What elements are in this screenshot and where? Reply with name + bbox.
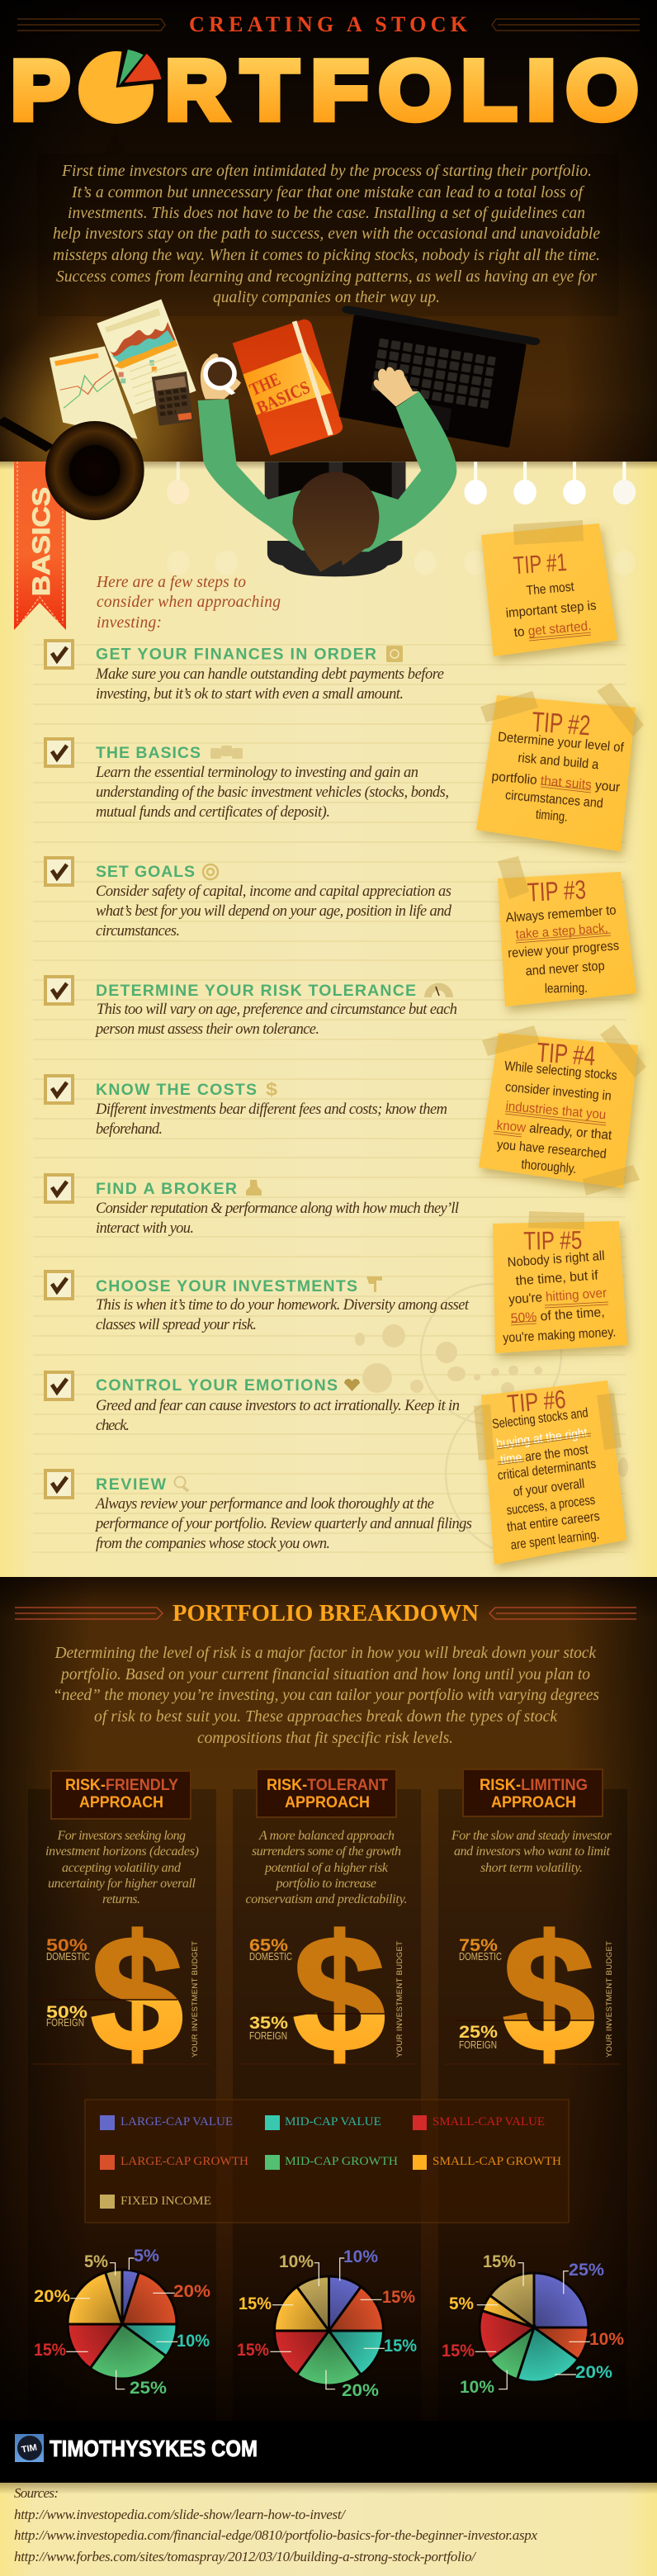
tip 4 note — [479, 1025, 646, 1196]
column: risk-friendly approach — [33, 1771, 210, 2086]
step title: GET YOUR FINANCES IN ORDER — [96, 646, 376, 664]
hand and coffee cup — [201, 353, 241, 399]
tip 6 note: buying at the right — [495, 1426, 588, 1451]
sources panel: http://www.investopedia.com/financial-edge/0810/portfolio-basics-for-the-beginner-investor.aspx — [14, 2527, 537, 2543]
book cover text: BASICS — [253, 376, 313, 418]
step text: Learn the essential terminology to investing and gain an — [95, 765, 418, 781]
tip 3 note: and never stop — [525, 959, 605, 978]
step: determine your risk tolerance — [45, 977, 457, 1038]
hanging white lights — [167, 462, 636, 575]
approach header: APPROACH — [79, 1794, 163, 1811]
approach description: conservatism and predictability. — [246, 1892, 408, 1906]
tip 1 note: TIP #1 — [513, 549, 568, 580]
checkbox — [45, 858, 73, 885]
step text: circumstances. — [96, 923, 180, 940]
step title: THE BASICS — [96, 744, 201, 762]
dollar split chart: $ — [293, 1901, 385, 2086]
icon: heart — [344, 1379, 360, 1391]
tip 4 note: consider investing in — [504, 1080, 612, 1104]
dollar split chart: $ — [503, 1901, 595, 2086]
dollar split chart — [33, 1901, 210, 2086]
title: portfolio with pie chart O: O — [566, 45, 638, 137]
pie chart: risk-limiting: 20% — [575, 2363, 612, 2382]
tip 1 note: important step is — [505, 599, 597, 621]
step title: DETERMINE YOUR RISK TOLERANCE — [96, 982, 416, 1000]
heading: creating a stock — [17, 12, 640, 36]
step text: performance of your portfolio. Review quarterly and annual filings — [94, 1516, 472, 1532]
tip 5 note: the time, but if — [515, 1269, 599, 1288]
icon: safe — [386, 646, 403, 662]
paper background — [0, 462, 657, 1577]
breakdown intro text — [53, 1645, 599, 1747]
approach description: For investors seeking long — [56, 1829, 186, 1843]
legend panel — [85, 2100, 569, 2223]
legend panel: MID-CAP GROWTH — [285, 2155, 398, 2168]
approach description: surrenders some of the growth — [252, 1844, 401, 1859]
tip 6 note: time are the most — [499, 1443, 589, 1467]
step: set goals — [45, 858, 452, 940]
step text — [95, 1101, 447, 1138]
step text: classes will spread your risk. — [96, 1317, 257, 1333]
step text — [94, 1496, 472, 1552]
pie chart: risk-limiting: 10% — [589, 2330, 624, 2349]
header background and desk — [0, 0, 657, 462]
step: know the costs — [45, 1076, 447, 1138]
dollar split chart: 35% — [249, 2014, 288, 2033]
step: review — [45, 1470, 472, 1552]
legend panel: LARGE-CAP GROWTH — [121, 2155, 248, 2168]
step title: FIND A BROKER — [96, 1180, 237, 1198]
title: portfolio with pie chart O: R — [166, 45, 228, 137]
approach header: APPROACH — [285, 1794, 370, 1811]
step text: Consider safety of capital, income and capital appreciation as — [96, 883, 451, 900]
approach description — [451, 1829, 612, 1875]
dollar split chart: 75% — [459, 1936, 498, 1955]
pie chart: risk-limiting: 15% — [442, 2342, 475, 2361]
footer brand bar — [0, 2421, 657, 2483]
dollar split chart: FOREIGN — [46, 2017, 84, 2029]
step text: Different investments bear different fees and costs; know them — [95, 1101, 447, 1118]
icon: magnifier — [175, 1476, 188, 1491]
dollar split chart: FOREIGN — [459, 2039, 497, 2051]
pie chart: risk-friendly: 15% — [34, 2341, 66, 2360]
step text — [96, 1297, 470, 1333]
step text — [95, 765, 449, 821]
tip 2 note: circumstances and — [504, 788, 603, 811]
dollar split chart: FOREIGN — [249, 2030, 287, 2042]
tip 5 note: 50% of the time, — [510, 1305, 605, 1326]
legend panel: FIXED INCOME — [121, 2195, 211, 2208]
sources panel: Sources: — [14, 2485, 59, 2501]
step title: SET GOALS — [96, 863, 195, 881]
heading: portfolio breakdown — [15, 1601, 636, 1627]
approach description: accepting volatility and — [62, 1861, 182, 1875]
step: get your finances in order — [45, 641, 444, 703]
dollar split chart: YOUR INVESTMENT BUDGET — [605, 1941, 614, 2057]
tip 6 note: success, a process — [506, 1494, 596, 1518]
icon: dollar: $ — [266, 1079, 277, 1100]
intro text panel: It’s a common but unnecessary fear that one mistake can lead to a total loss of — [71, 184, 585, 201]
pie chart: risk-limiting: 10% — [460, 2378, 494, 2397]
step text: mutual funds and certificates of deposit). — [96, 804, 330, 821]
tip 6 note: are spent learning. — [510, 1528, 600, 1553]
column: risk-tolerant approach — [238, 1769, 415, 2086]
pie chart: risk-friendly: 5% — [134, 2247, 159, 2266]
icon: plant — [366, 1276, 382, 1292]
pie chart: risk-tolerant: 10% — [343, 2247, 378, 2266]
tip 5 note: Nobody is right all — [507, 1249, 605, 1270]
checkbox — [45, 739, 73, 766]
approach description: A more balanced approach — [258, 1829, 395, 1843]
step title: CONTROL YOUR EMOTIONS — [96, 1376, 338, 1395]
intro to steps: Here are a few steps to — [96, 574, 246, 591]
dollar split chart: 50% — [46, 1936, 87, 1955]
pie chart: risk-friendly — [34, 2247, 210, 2398]
step text — [96, 1200, 459, 1237]
calculator — [152, 372, 194, 426]
approach header: APPROACH — [491, 1794, 576, 1811]
tip 1 note — [481, 520, 617, 656]
breakdown intro text: compositions that fit specific risk levels. — [197, 1730, 453, 1747]
tip 4 note: TIP #4 — [536, 1037, 597, 1071]
step text — [95, 666, 444, 703]
tip 2 note: Determine your level of — [497, 730, 625, 755]
tip 3 note: take a step back, — [515, 921, 608, 942]
tip 4 note: industries that you — [505, 1100, 607, 1122]
tip 1 note: The most — [526, 580, 575, 599]
tip 5 note: you're making money. — [503, 1325, 617, 1346]
sources panel: http://www.forbes.com/sites/tomaspray/2012/03/10/building-a-strong-stock-portfolio/ — [14, 2549, 477, 2564]
legend panel: SMALL-CAP GROWTH — [432, 2155, 561, 2168]
ribbon: basics: BASICS — [28, 487, 55, 596]
dollar split chart: YOUR INVESTMENT BUDGET — [191, 1941, 200, 2057]
logo: TIM — [21, 2442, 38, 2455]
dollar split chart: DOMESTIC — [459, 1951, 502, 1963]
chair — [265, 462, 405, 576]
pie chart: risk-tolerant: 15% — [382, 2288, 415, 2307]
logo — [15, 2434, 44, 2462]
approach header: RISK-LIMITING — [480, 1777, 588, 1794]
intro text panel — [37, 132, 619, 316]
breakdown intro text: portfolio. Based on your current financial situation and how long until you plan to — [59, 1666, 590, 1683]
title: portfolio with pie chart O: O — [78, 45, 154, 137]
approach description: returns. — [102, 1892, 140, 1906]
icon: person — [246, 1180, 262, 1196]
step text: This is when it’s time to do your homework. Diversity among asset — [96, 1297, 470, 1314]
step text: understanding of the basic investment vehicles (stocks, bonds, — [96, 784, 449, 801]
icon: target — [203, 864, 218, 879]
legend panel: LARGE-CAP VALUE — [121, 2115, 233, 2129]
tip 2 note: risk and build a — [518, 751, 599, 772]
tip 5 note: TIP #5 — [523, 1225, 583, 1256]
checkbox — [45, 977, 73, 1004]
dollar split chart: 25% — [459, 2023, 498, 2042]
step title: CHOOSE YOUR INVESTMENTS — [96, 1277, 357, 1295]
checkbox — [45, 1271, 73, 1299]
pie chart: risk-limiting: 15% — [483, 2252, 516, 2271]
tip 6 note: of your overall — [513, 1477, 585, 1499]
pie chart: risk-tolerant: 20% — [342, 2381, 379, 2400]
title: portfolio with pie chart O: L — [461, 45, 517, 137]
step text: person must assess their own tolerance. — [94, 1021, 319, 1038]
pie chart: risk-tolerant — [237, 2247, 417, 2400]
title: portfolio with pie chart O: O — [379, 45, 451, 137]
pie chart: risk-friendly: 25% — [130, 2379, 167, 2398]
dollar split chart: 50% — [46, 2003, 87, 2022]
title: portfolio with pie chart O: F — [311, 45, 368, 137]
tip 1 note: to get started. — [513, 619, 592, 640]
laptop keyboard — [371, 337, 496, 409]
tip 3 note — [498, 856, 636, 1006]
intro to steps: consider when approaching — [97, 594, 281, 611]
step title: KNOW THE COSTS — [96, 1081, 257, 1099]
checkbox — [45, 1076, 73, 1103]
laptop — [342, 310, 534, 446]
tip 3 note: Always remember to — [505, 903, 617, 926]
approach description: For the slow and steady investor — [451, 1829, 612, 1843]
step text: what’s best for you will depend on your age, position in life and — [96, 903, 452, 920]
pie chart: risk-friendly: 5% — [84, 2252, 108, 2271]
icon: blocks — [210, 746, 243, 759]
intro text panel: missteps along the way. When it comes to picking stocks, nobody is right all the time. — [53, 247, 600, 264]
tip 4 note: you have researched — [496, 1138, 607, 1162]
checkbox — [45, 1175, 73, 1202]
step text — [94, 1002, 457, 1038]
heading: portfolio breakdown: PORTFOLIO BREAKDOWN — [173, 1601, 479, 1627]
checkbox — [45, 641, 73, 668]
approach header: RISK-FRIENDLY — [65, 1777, 178, 1794]
step text: from the companies whose stock you own. — [96, 1536, 330, 1552]
sources panel: http://www.investopedia.com/slide-show/learn-how-to-invest/ — [14, 2507, 347, 2522]
person at desk — [198, 353, 456, 576]
dollar split chart: DOMESTIC — [46, 1951, 90, 1963]
tip 2 note: timing. — [535, 807, 569, 825]
approach description: short term volatility. — [480, 1861, 583, 1875]
intro text panel: quality companies on their way up. — [213, 289, 440, 306]
pie chart: risk-tolerant: 15% — [384, 2337, 417, 2356]
icon: gauge — [424, 983, 453, 997]
title: portfolio with pie chart O: T — [242, 45, 298, 137]
tip 2 note: portfolio that suits your — [491, 769, 621, 795]
pie chart: risk-friendly: 20% — [34, 2287, 70, 2306]
pie chart: risk-tolerant: 15% — [239, 2294, 272, 2313]
dollar split chart — [238, 1901, 415, 2086]
approach description — [45, 1829, 199, 1906]
step: control your emotions — [45, 1372, 460, 1434]
portfolio breakdown background — [0, 1577, 657, 2421]
coffee stains — [355, 1284, 628, 1556]
desk lamp — [0, 419, 144, 520]
intro text panel: help investors stay on the path to success, even with the occasional and unavoidable — [53, 225, 600, 243]
pie chart: risk-limiting — [442, 2252, 624, 2397]
checkbox — [45, 1372, 73, 1399]
book cover text: THE — [247, 368, 283, 400]
title: portfolio with pie chart O: P — [12, 45, 69, 137]
tip 4 note: know already, or that — [496, 1119, 612, 1143]
step text: check. — [96, 1418, 130, 1434]
approach description — [246, 1829, 408, 1906]
step: find a broker — [45, 1175, 459, 1237]
step: the basics — [45, 739, 449, 821]
tip 2 note — [476, 683, 644, 851]
approach header: RISK-TOLERANT — [267, 1777, 388, 1794]
intro to steps: investing: — [97, 614, 162, 632]
checkbox — [45, 1470, 73, 1498]
step text — [96, 1398, 460, 1434]
step text: This too will vary on age, preference and circumstance but each — [97, 1002, 457, 1018]
step: choose your investments — [45, 1271, 470, 1333]
step text — [96, 883, 452, 940]
tip 3 note: learning. — [545, 982, 588, 996]
tip 6 note: TIP #6 — [506, 1385, 567, 1418]
pie chart: risk-tolerant: 15% — [237, 2341, 269, 2360]
step text: Always review your performance and look thoroughly at the — [94, 1496, 434, 1513]
tip 3 note: TIP #3 — [527, 874, 587, 907]
intro text panel: investments. This does not have to be the case. Installing a set of guidelines can — [68, 205, 585, 222]
column: risk-limiting approach — [443, 1769, 621, 2086]
step title: REVIEW — [96, 1475, 167, 1494]
tip 6 note: that entire careers — [506, 1509, 601, 1535]
tip 6 note — [474, 1380, 626, 1565]
dollar split chart — [443, 1901, 621, 2086]
breakdown intro text: “need” the money you’re investing, you can tailor your portfolio with varying degrees — [53, 1687, 599, 1704]
pie chart: risk-friendly: 10% — [177, 2332, 210, 2351]
tip 3 note: review your progress — [508, 939, 620, 961]
approach header — [463, 1769, 603, 1816]
step text: Make sure you can handle outstanding debt payments before — [95, 666, 444, 683]
approach description: portfolio to increase — [276, 1877, 376, 1891]
step text: investing, but it’s ok to start with even a small amount. — [96, 686, 404, 703]
ribbon: basics — [14, 462, 66, 630]
pie chart: risk-friendly: 20% — [173, 2282, 210, 2301]
heading: creating a stock: CREATING A STOCK — [189, 12, 468, 36]
approach description: uncertainty for higher overall — [48, 1877, 196, 1891]
approach header — [51, 1771, 191, 1819]
title: portfolio with pie chart O: I — [527, 45, 556, 137]
brand name: TIMOTHYSYKES COM — [50, 2436, 258, 2461]
dollar split chart: 65% — [249, 1936, 288, 1955]
intro text panel: First time investors are often intimidated by the process of starting their portfolio. — [61, 163, 592, 180]
tip 6 note: Selecting stocks and — [491, 1406, 589, 1432]
breakdown intro text: Determining the level of risk is a major factor in how you will break down your stock — [54, 1645, 596, 1662]
tip 5 note — [493, 1211, 627, 1353]
pie chart: risk-limiting: 25% — [569, 2261, 604, 2280]
stock report papers — [50, 299, 196, 439]
sources panel — [0, 2483, 657, 2576]
tip 4 note: While selecting stocks — [503, 1059, 617, 1083]
title: portfolio with pie chart O — [12, 45, 638, 137]
step text: Consider reputation & performance along with how much they’ll — [96, 1200, 459, 1217]
step text: beforehand. — [96, 1121, 163, 1138]
pie chart: risk-tolerant: 10% — [279, 2252, 314, 2271]
tip 5 note: you're hitting over — [508, 1286, 607, 1307]
step text: interact with you. — [96, 1220, 194, 1237]
intro to steps — [96, 574, 281, 632]
book: the basics — [233, 320, 343, 456]
breakdown intro text: of risk to best suit you. These approaches break down the types of stock — [94, 1708, 557, 1726]
approach description: and investors who want to limit — [454, 1844, 611, 1859]
approach column backgrounds — [28, 1789, 627, 2421]
hair — [292, 472, 379, 572]
legend panel: SMALL-CAP VALUE — [432, 2115, 545, 2129]
approach header — [257, 1769, 396, 1817]
dollar split chart: DOMESTIC — [249, 1951, 292, 1963]
tip 2 note: TIP #2 — [531, 707, 592, 741]
hand on keyboard — [374, 367, 419, 407]
approach description: potential of a higher risk — [264, 1861, 389, 1875]
intro text panel: Success comes from learning and recognizing patterns, as well as having an eye for — [56, 268, 597, 286]
pie chart: risk-limiting: 5% — [449, 2294, 474, 2313]
tip 4 note: thoroughly. — [521, 1158, 577, 1177]
arms and sweater — [198, 391, 456, 552]
dollar split chart: $ — [91, 1901, 183, 2086]
step text: Greed and fear can cause investors to act irrationally. Keep it in — [96, 1398, 460, 1414]
legend panel: MID-CAP VALUE — [285, 2115, 381, 2129]
tip 6 note: critical determinants — [497, 1457, 597, 1483]
dollar split chart: YOUR INVESTMENT BUDGET — [395, 1941, 404, 2057]
approach description: investment horizons (decades) — [45, 1844, 199, 1859]
